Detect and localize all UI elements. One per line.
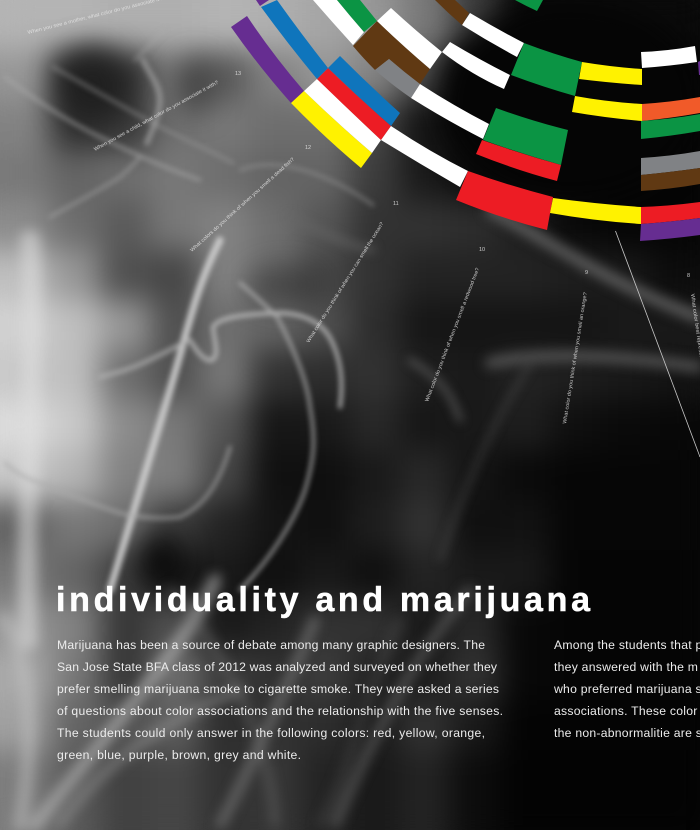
question numbers: 12 <box>305 145 311 151</box>
question numbers: 13 <box>235 71 241 77</box>
ring segment: white second <box>442 42 510 89</box>
ring segment: yellow upper <box>579 62 642 85</box>
ring segment: yellow bottom <box>550 198 641 224</box>
title: individuality and marijuana <box>56 581 591 619</box>
text block: right column <box>553 638 700 740</box>
ring segment: big red <box>456 171 553 230</box>
text block: left column: green, blue, purple, brown, grey and white. <box>57 748 301 762</box>
ring segment: long white <box>381 126 468 187</box>
text block: left column <box>57 638 503 762</box>
question numbers: 10 <box>479 247 485 253</box>
ring segment: big green <box>483 108 568 165</box>
radial color chart <box>231 0 700 241</box>
ring segment: purple edge <box>698 61 700 75</box>
text block: left column: San Jose State BFA class of 2012 was analyzed and surveyed on whether they <box>57 660 498 674</box>
ring segment: yellow <box>291 91 372 168</box>
question: ocean: What color do you think of when you can smell the ocean? <box>306 221 386 344</box>
ring segment: yellow second <box>572 96 642 121</box>
text block: left column: prefer smelling marijuana smoke to cigarette smoke. They were asked a series <box>57 682 499 696</box>
ring segment: brown right <box>641 168 700 191</box>
ring segment: top green <box>337 0 377 32</box>
ring segment: blue long <box>261 0 328 79</box>
question numbers: 11 <box>393 201 399 207</box>
ring segment: brown top <box>435 0 469 25</box>
question numbers: 8 <box>687 273 690 279</box>
ring segment: purple right <box>640 218 700 241</box>
ring segment: green top <box>515 0 543 11</box>
question numbers <box>235 71 690 279</box>
ring segment: green middle <box>511 43 582 96</box>
ring segment: white right <box>641 46 697 68</box>
question: dead fish: What colors do you think of when you smell a dead fish? <box>189 157 296 253</box>
question: redwood: What color do you think of when you smell a redwood tree? <box>424 267 481 403</box>
ring segment: red <box>317 68 391 140</box>
question: orange: What color do you think of when you smell an orange? <box>562 292 589 424</box>
text block: right column: they answered with the m <box>554 660 698 674</box>
ring segment: orange <box>642 97 700 121</box>
ring segment: white <box>304 79 381 153</box>
ring segment: white upper <box>377 8 442 69</box>
ring segment: green right <box>641 114 700 139</box>
ring segment: white third <box>411 84 489 139</box>
ring segment: grey <box>375 59 420 98</box>
pointer line <box>616 231 700 457</box>
ring segment: red right <box>641 202 700 224</box>
text block: left column: of questions about color associations and the relationship with the five senses. <box>57 704 503 718</box>
text block: left column: Marijuana has been a source of debate among many graphic designers. The <box>57 638 485 652</box>
text block: right column: Among the students that p <box>554 638 700 652</box>
text block: right column: associations. These color <box>554 704 698 718</box>
ring segment: small red <box>476 140 561 181</box>
text block: left column: The students could only answer in the following colors: red, yellow, orange, <box>57 726 485 740</box>
ring segment: top white <box>313 0 364 45</box>
question numbers: 9 <box>585 270 588 276</box>
ring segment: white top right <box>462 13 524 57</box>
rotated question labels <box>27 0 700 424</box>
text block: right column: who preferred marijuana s <box>553 682 700 696</box>
ring segment: blue short <box>328 56 400 126</box>
question: child: When you see a child, what color do you associate it with? <box>93 80 220 153</box>
ring segment: purple top <box>256 0 269 6</box>
ring segment: brown <box>353 21 430 84</box>
text block: right column: the non-abnormalitie are s <box>554 726 700 740</box>
ring segment: left purple <box>231 16 304 103</box>
ring segment: grey right <box>641 151 700 175</box>
